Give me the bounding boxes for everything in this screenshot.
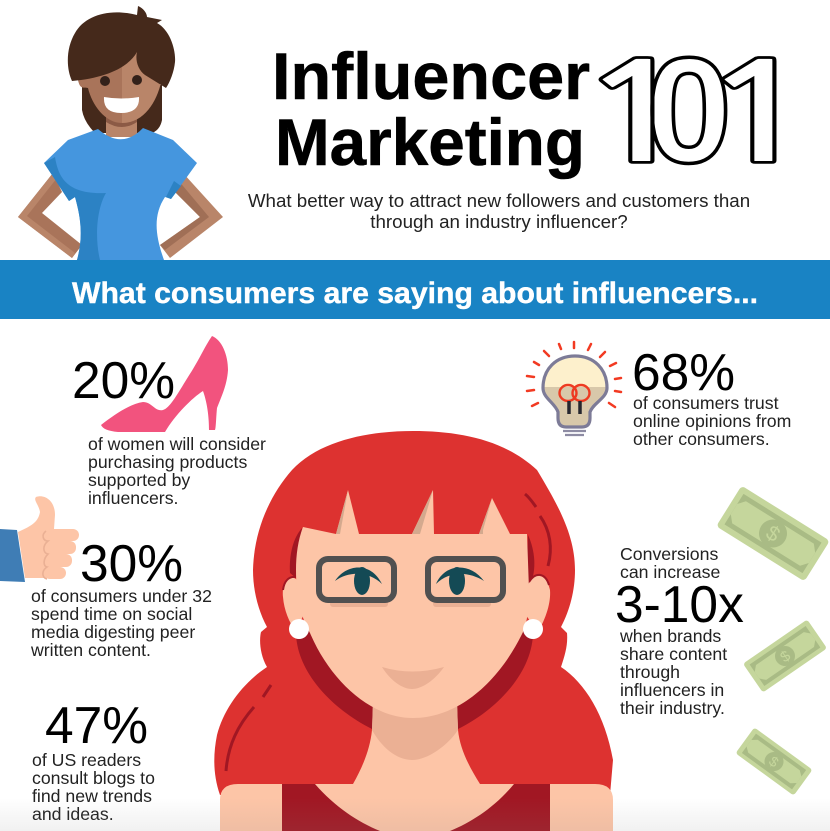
icon: dollar bill middle [743, 619, 827, 693]
stat: 47 percent: consult blogs to [32, 768, 155, 788]
subtitle [248, 190, 750, 232]
title numeral: outlined 101: 0 [646, 27, 732, 195]
stat: 47 percent: 47% [45, 696, 148, 754]
stat: 3-10x conversions: when brands [619, 626, 721, 646]
stat: 30 percent: spend time on social [31, 604, 192, 624]
stat: 47 percent [32, 696, 155, 824]
icon: dollar bill middle: $ [777, 647, 794, 666]
banner [0, 260, 830, 319]
stat: 30 percent: media digesting peer [31, 622, 195, 642]
stat: 3-10x conversions: their industry. [620, 698, 725, 718]
banner: What consumers are saying about influencers... [72, 277, 758, 310]
stat: 20 percent: 20% [72, 351, 175, 409]
stat: 3-10x conversions: can increase [620, 562, 720, 582]
icon: dollar bill top [716, 486, 830, 581]
title numeral: outlined 101 [574, 27, 821, 195]
icon: pink high heel [101, 336, 228, 432]
stat: 3-10x conversions: through [620, 662, 680, 682]
stat: 68 percent: of consumers trust [633, 393, 779, 413]
stat: 68 percent: online opinions from [633, 411, 791, 431]
stat: 20 percent [72, 351, 266, 508]
illustration: smiling woman in blue shirt [18, 6, 223, 260]
stat: 30 percent: of consumers under 32 [31, 586, 212, 606]
title: Influencer [272, 39, 590, 113]
icon: light bulb [527, 342, 621, 435]
stat: 68 percent: other consumers. [633, 429, 770, 449]
subtitle: What better way to attract new followers and customers than [248, 190, 750, 211]
title numeral: outlined 101: 1 [574, 47, 699, 183]
icon: dollar bill bottom [735, 727, 813, 796]
stat: 47 percent: find new trends [32, 786, 152, 806]
illustration: red-haired woman with glasses [214, 431, 613, 831]
stat: 3-10x conversions [615, 544, 744, 718]
stat: 68 percent: 68% [632, 343, 735, 401]
icon: dollar bill top: $ [762, 521, 784, 547]
stat: 47 percent: and ideas. [32, 804, 114, 824]
stat: 3-10x conversions: share content [620, 644, 727, 664]
stat: 20 percent: of women will consider [88, 434, 266, 454]
stat: 3-10x conversions: 3-10x [615, 575, 744, 633]
stat: 68 percent [632, 343, 791, 449]
title [272, 39, 590, 179]
icon: thumbs up with blue sleeve [0, 496, 79, 582]
stat: 20 percent: influencers. [88, 488, 178, 508]
stat: 3-10x conversions: Conversions [620, 544, 718, 564]
stat: 20 percent: supported by [88, 470, 190, 490]
title: Marketing [275, 105, 585, 179]
title numeral: outlined 101: 1 [696, 47, 821, 183]
stat: 30 percent [30, 534, 212, 660]
stat: 3-10x conversions: influencers in [620, 680, 724, 700]
icon: dollar bill bottom: $ [766, 753, 782, 770]
stat: 30 percent: written content. [30, 640, 151, 660]
stat: 20 percent: purchasing products [88, 452, 247, 472]
stat: 30 percent: 30% [80, 534, 183, 592]
subtitle: through an industry influencer? [370, 211, 628, 232]
stat: 47 percent: of US readers [32, 750, 141, 770]
